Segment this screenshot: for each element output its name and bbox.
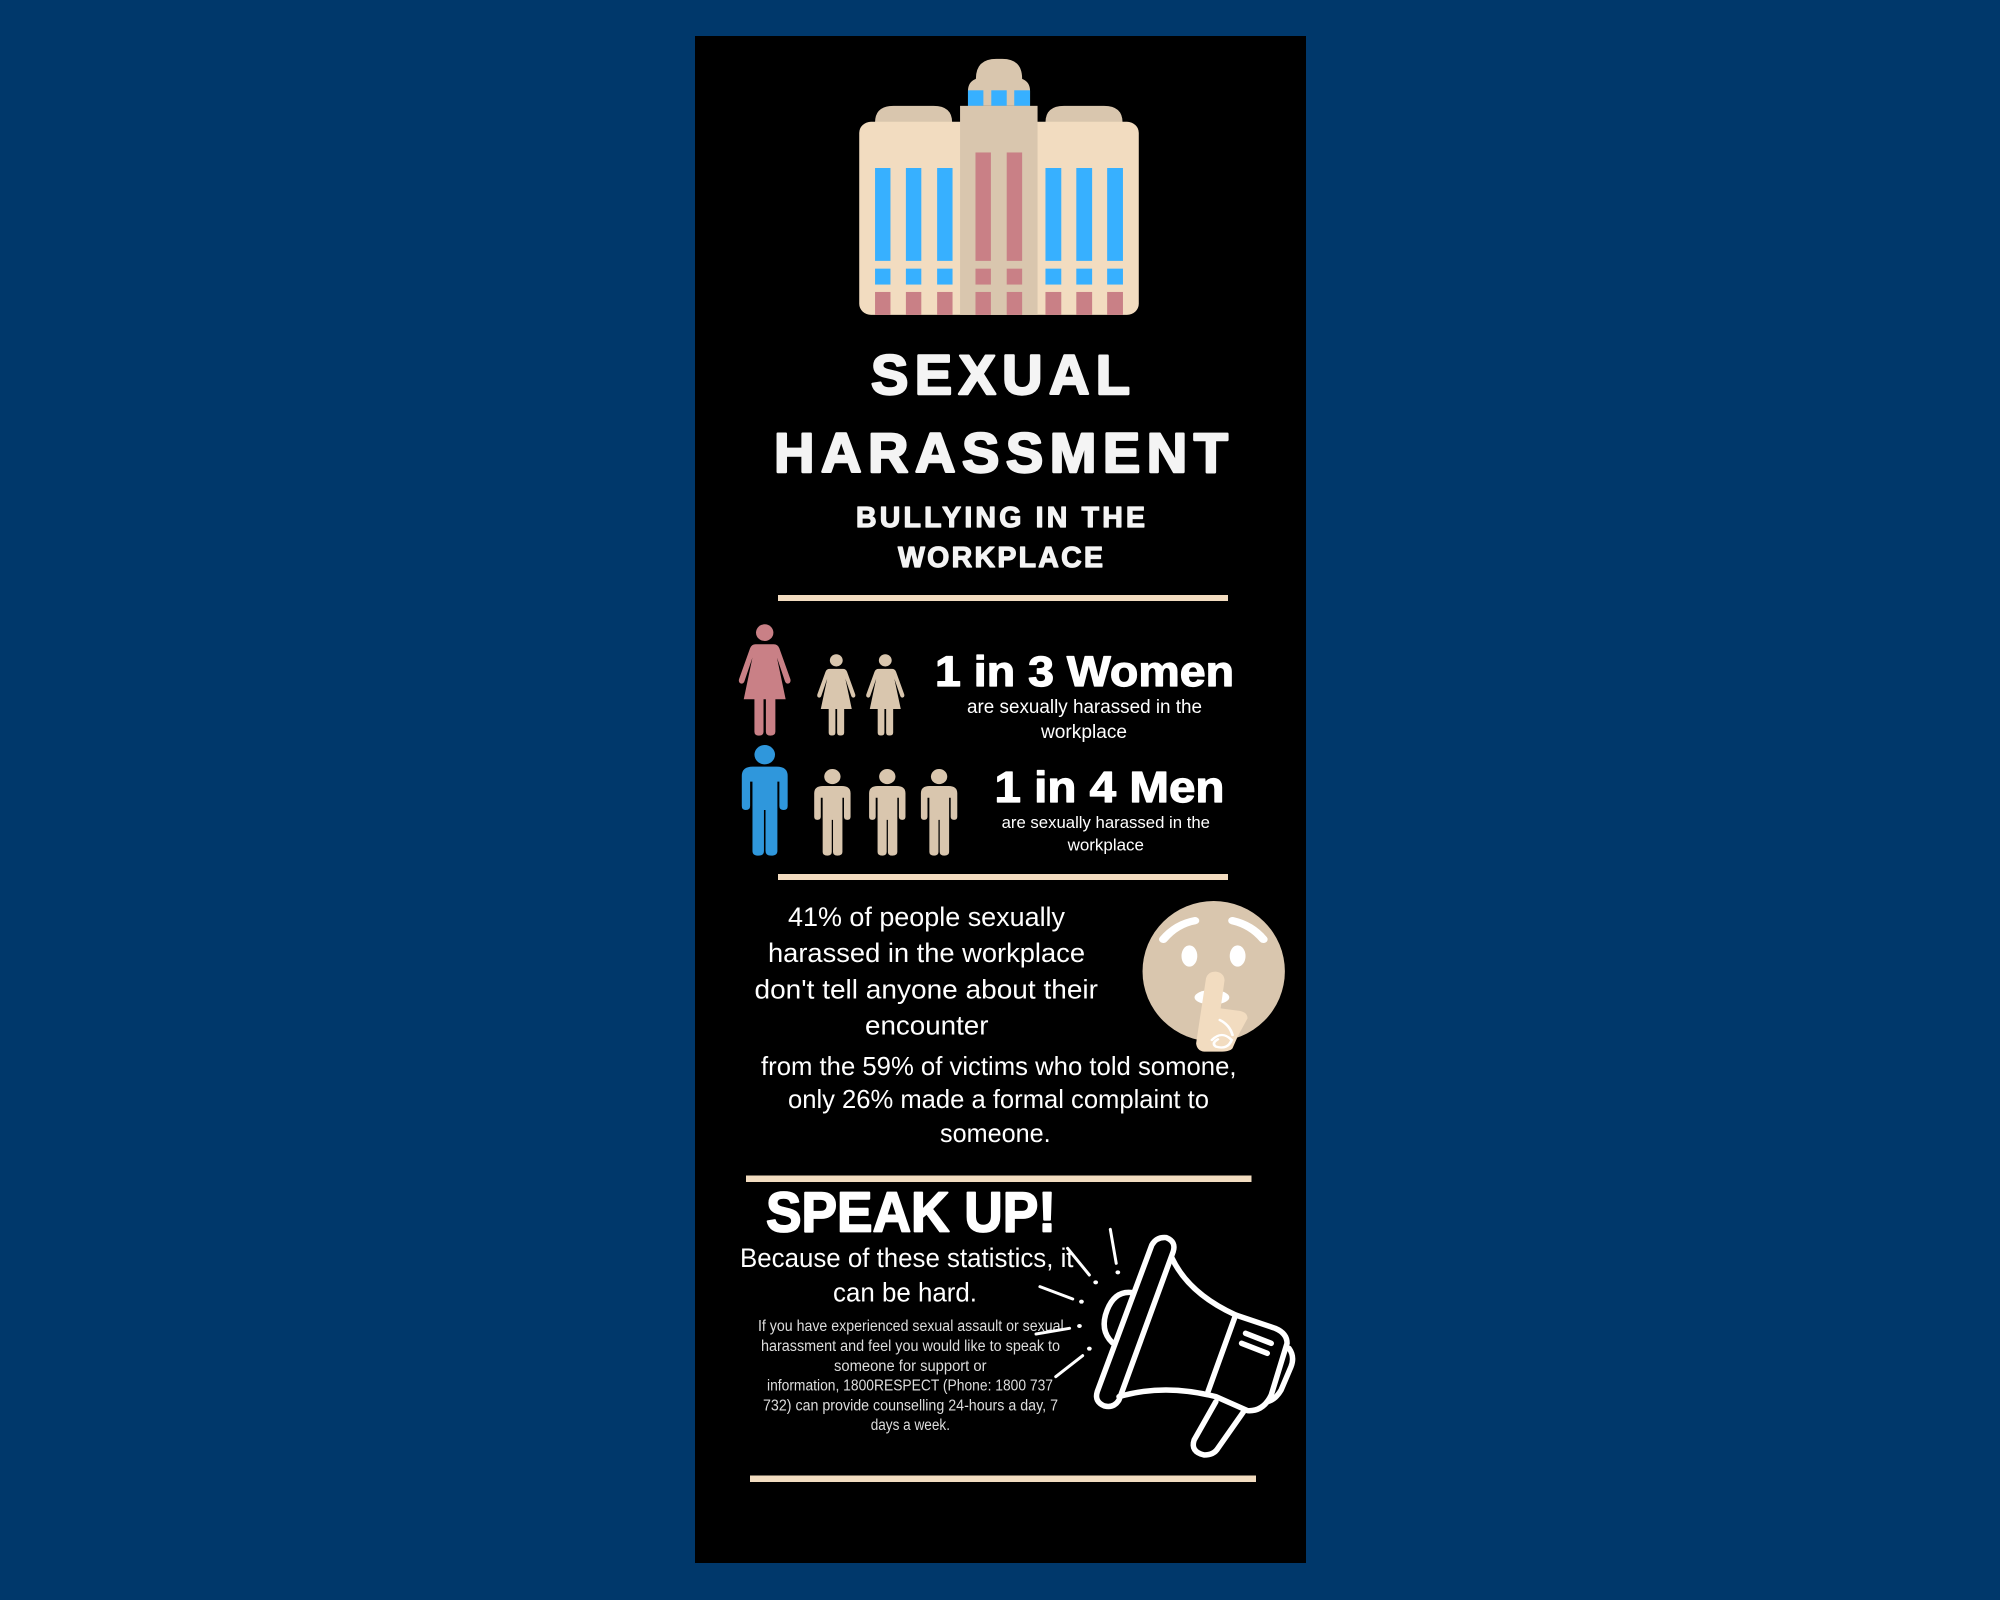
stat: 1 in 3 women: [935, 648, 1234, 743]
stat: 1 in 3 women: 1 in 3 Women: [935, 648, 1234, 696]
title: [774, 343, 1228, 484]
stat: 1 in 4 men: workplace: [1067, 836, 1144, 855]
icon: shushing face: [1143, 901, 1285, 1052]
subtitle: [856, 502, 1145, 574]
icon: office building: [859, 59, 1139, 315]
title: SEXUAL: [871, 343, 1130, 406]
text: support information: 732) can provide counselling 24-hours a day, 7: [763, 1398, 1058, 1415]
stat: 1 in 3 women: are sexually harassed in the: [967, 697, 1202, 718]
text: because of these statistics: [740, 1243, 1074, 1308]
text: support information: If you have experienced sexual assault or sexual: [758, 1318, 1064, 1335]
text: 59% told someone: from the 59% of victims who told somone,: [761, 1051, 1236, 1081]
text: support information: days a week.: [871, 1417, 950, 1434]
icon: megaphone: [1036, 1229, 1293, 1455]
text: 41% tell no one: encounter: [865, 1011, 989, 1041]
text: 59% told someone: [761, 1051, 1236, 1148]
text: support information: harassment and feel you would like to speak to: [761, 1338, 1060, 1355]
text: 59% told someone: someone.: [940, 1118, 1051, 1148]
icon: men row, one in four highlighted: [742, 745, 957, 856]
text: 41% tell no one: harassed in the workplace: [768, 938, 1085, 968]
text: because of these statistics: can be hard.: [833, 1278, 977, 1308]
stat: 1 in 4 men: are sexually harassed in the: [1002, 813, 1210, 832]
text: because of these statistics: Because of these statistics, it: [740, 1243, 1074, 1273]
text: support information: information, 1800RESPECT (Phone: 1800 737: [767, 1378, 1053, 1395]
stat: 1 in 3 women: workplace: [1040, 722, 1127, 743]
icon: women row, one in three highlighted: [739, 624, 904, 736]
subtitle: BULLYING IN THE: [856, 502, 1145, 534]
text: 41% tell no one: 41% of people sexually: [788, 902, 1065, 932]
panel: black poster: [695, 36, 1306, 1563]
stat: 1 in 4 men: [994, 763, 1224, 855]
text: support information: someone for support or: [834, 1358, 986, 1375]
text: support information: [758, 1318, 1064, 1434]
text: 41% tell no one: don't tell anyone about their: [754, 975, 1098, 1005]
subtitle: WORKPLACE: [898, 542, 1103, 574]
text: 41% tell no one: [754, 902, 1098, 1041]
stat: 1 in 4 men: 1 in 4 Men: [994, 763, 1224, 812]
text: 59% told someone: only 26% made a formal complaint to: [788, 1084, 1209, 1114]
title: HARASSMENT: [774, 421, 1228, 484]
heading: speak up: SPEAK UP!: [766, 1181, 1056, 1245]
